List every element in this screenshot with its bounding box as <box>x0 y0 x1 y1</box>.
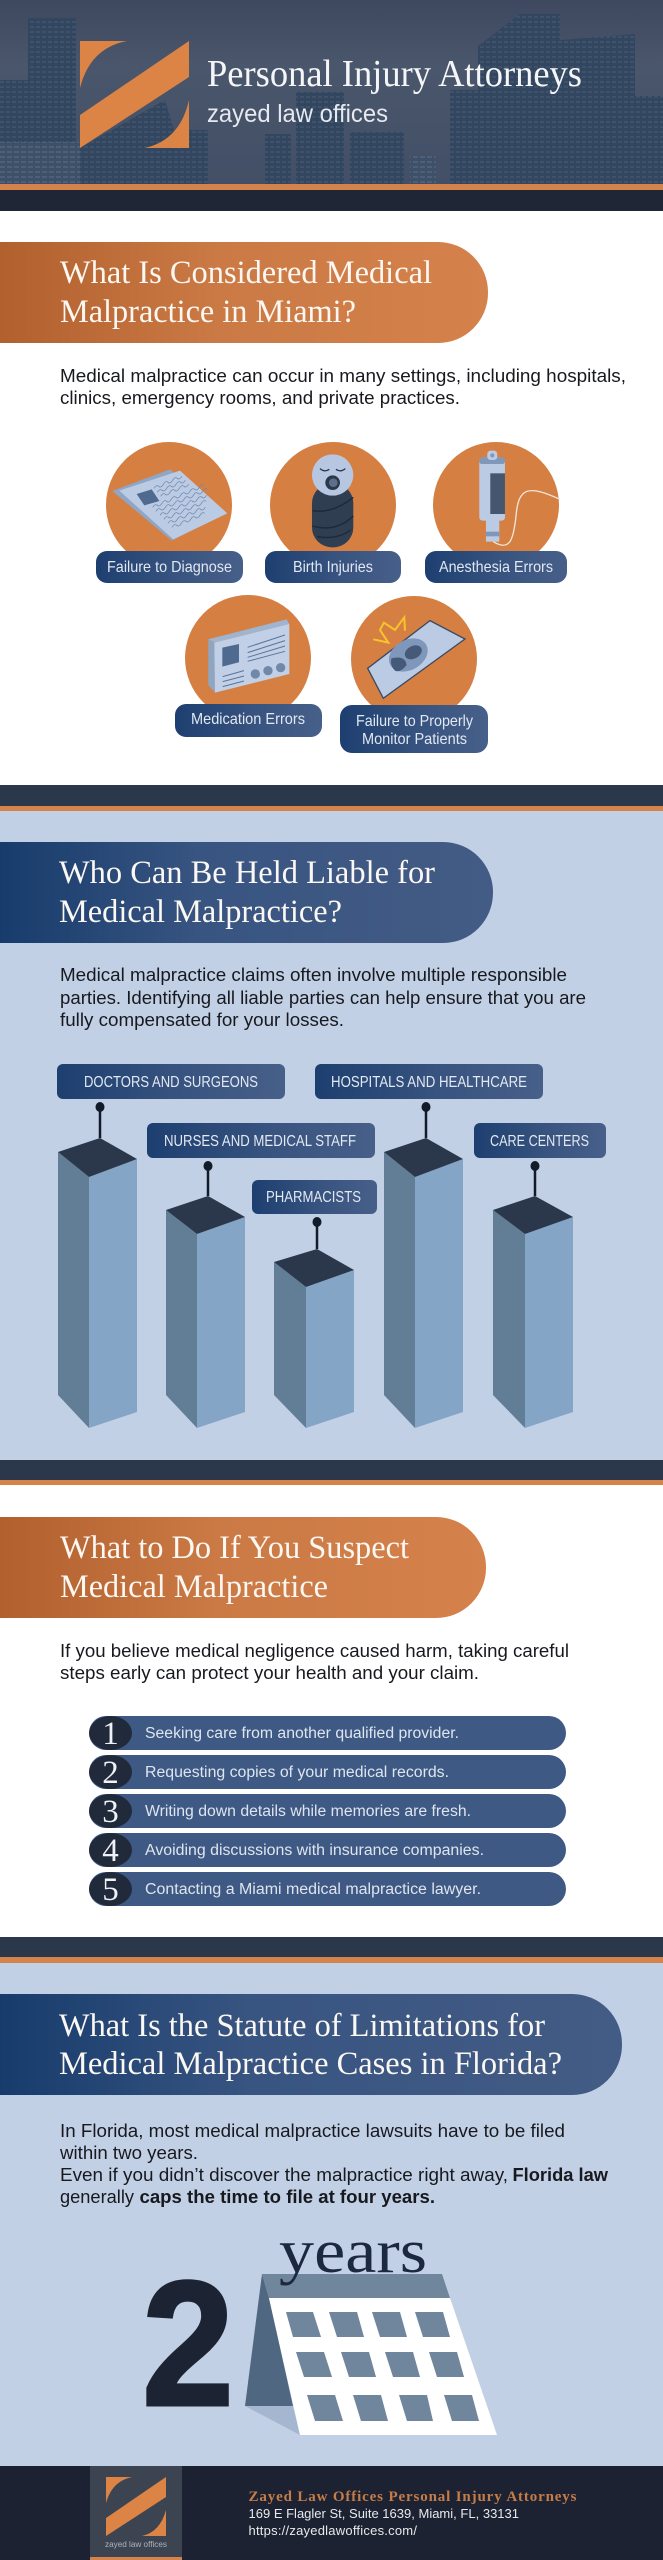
icon card: failure to diagnose <box>96 442 243 583</box>
bar: pharmacists: PHARMACISTS <box>266 1189 361 1206</box>
step 5: 5 <box>102 1872 119 1908</box>
brand title: Personal Injury Attorneys <box>207 53 582 95</box>
heading pill <box>0 1517 486 1618</box>
bar: hospitals and healthcare <box>315 1064 543 1428</box>
heading pill <box>0 1994 622 2095</box>
intro paragraph: steps early can protect your health and your claim. <box>60 1662 479 1683</box>
bar: hospitals and healthcare: HOSPITALS AND HEALTHCARE <box>331 1074 527 1091</box>
intro paragraph: Even if you didn’t discover the malpractice right away, <box>60 2164 508 2185</box>
skyline background <box>0 0 663 184</box>
panel: who can be held liable <box>0 785 663 1485</box>
heading pill: What Is Considered Medical <box>60 255 432 291</box>
header stripe orange <box>0 184 663 190</box>
panel: statute of limitations <box>0 1937 663 2466</box>
intro paragraph <box>60 1640 569 1683</box>
heading pill: What to Do If You Suspect <box>60 1530 409 1566</box>
icon: newspaper <box>112 469 227 541</box>
icon: monitor slab with alert <box>368 617 465 698</box>
step 3: 3 <box>102 1794 119 1830</box>
label <box>96 551 243 583</box>
step 4: Avoiding discussions with insurance companies. <box>145 1842 484 1859</box>
intro paragraph <box>60 964 586 1030</box>
intro paragraph: Florida law <box>512 2164 609 2185</box>
footer url: https://zayedlawoffices.com/ <box>248 2523 417 2538</box>
heading pill: Medical Malpractice Cases in Florida? <box>59 2046 562 2082</box>
label <box>175 704 322 737</box>
bar: pharmacists <box>252 1180 377 1428</box>
big number 2: 2 <box>142 2244 234 2443</box>
label: Medication Errors <box>191 711 305 728</box>
intro paragraph: parties. Identifying all liable parties can help ensure that you are <box>60 987 586 1008</box>
label: Anesthesia Errors <box>439 559 553 576</box>
step 3 <box>89 1794 566 1830</box>
icon: swaddled baby <box>312 454 353 547</box>
step 1 <box>89 1716 566 1752</box>
section stripe orange <box>0 1957 663 1963</box>
panel background <box>0 811 663 1460</box>
intro paragraph <box>60 365 626 408</box>
logo mark <box>80 41 189 148</box>
bar: nurses and medical staff: NURSES AND MEDICAL STAFF <box>164 1133 356 1150</box>
numbered list <box>89 1716 566 1908</box>
heading pill: Medical Malpractice <box>60 1569 328 1605</box>
icon card: anesthesia errors <box>425 442 567 583</box>
label: Failure to Diagnose <box>107 559 232 576</box>
label: Birth Injuries <box>293 559 373 576</box>
icon card: failure to properly monitor patients <box>340 596 488 753</box>
word years: years <box>279 2218 427 2286</box>
heading pill <box>0 242 488 343</box>
icon: calendar <box>245 2274 497 2435</box>
step 4: 4 <box>102 1833 119 1869</box>
section stripe orange <box>0 806 663 811</box>
icon card: birth injuries <box>265 442 401 583</box>
panel background <box>0 1485 663 1937</box>
icon: chart card <box>208 619 289 693</box>
header banner <box>0 0 663 211</box>
bar: care centers <box>474 1123 606 1428</box>
brand subtitle: zayed law offices <box>207 100 388 128</box>
panel background <box>0 211 663 785</box>
bar: doctors and surgeons <box>57 1064 285 1428</box>
footer firm name: Zayed Law Offices Personal Injury Attorneys <box>248 2489 577 2505</box>
heading pill: Who Can Be Held Liable for <box>59 855 435 891</box>
intro paragraph: If you believe medical negligence caused harm, taking careful <box>60 1640 569 1661</box>
label: Failure to Properly <box>356 713 473 730</box>
section stripe orange lower <box>0 1480 663 1485</box>
intro paragraph <box>59 2120 609 2207</box>
heading pill: Malpractice in Miami? <box>60 294 356 330</box>
intro paragraph: Medical malpractice claims often involve multiple responsible <box>60 964 567 985</box>
section stripe dark <box>0 1937 663 1957</box>
intro paragraph: within two years. <box>59 2142 198 2163</box>
intro paragraph: Medical malpractice can occur in many settings, including hospitals, <box>60 365 626 386</box>
panel: what is considered medical malpractice <box>0 211 663 785</box>
bar chart: liable parties <box>57 1064 606 1428</box>
label <box>425 551 567 583</box>
heading pill: What Is the Statute of Limitations for <box>59 2008 545 2044</box>
footer background <box>0 2466 663 2560</box>
heading pill <box>0 842 493 943</box>
bar: care centers: CARE CENTERS <box>490 1133 589 1150</box>
intro paragraph: fully compensated for your losses. <box>60 1009 344 1030</box>
label <box>340 705 488 753</box>
heading pill: Medical Malpractice? <box>59 894 342 930</box>
footer logo <box>90 2466 182 2560</box>
footer logo: zayed law offices <box>105 2540 167 2549</box>
icon card: medication errors <box>175 595 322 737</box>
step 1: Seeking care from another qualified provider. <box>145 1725 459 1742</box>
bar: nurses and medical staff <box>147 1123 375 1428</box>
label <box>265 551 401 583</box>
footer address: 169 E Flagler St, Suite 1639, Miami, FL, 33131 <box>248 2506 519 2521</box>
icon: anesthesia syringe <box>479 451 560 545</box>
step 5 <box>89 1872 566 1908</box>
intro paragraph: clinics, emergency rooms, and private practices. <box>60 387 460 408</box>
panel background <box>0 1963 663 2466</box>
intro paragraph: In Florida, most medical malpractice lawsuits have to be filed <box>60 2120 565 2141</box>
step 3: Writing down details while memories are fresh. <box>145 1803 471 1820</box>
header stripe dark <box>0 190 663 211</box>
bar: doctors and surgeons: DOCTORS AND SURGEONS <box>84 1074 258 1091</box>
step 2: Requesting copies of your medical records. <box>145 1764 449 1781</box>
step 2: 2 <box>102 1755 119 1791</box>
intro paragraph: caps the time to file at four years. <box>140 2186 435 2207</box>
step 2 <box>89 1755 566 1791</box>
footer <box>0 2466 663 2560</box>
section stripe dark lower <box>0 1460 663 1480</box>
label: Monitor Patients <box>362 731 467 748</box>
step 5: Contacting a Miami medical malpractice lawyer. <box>145 1881 481 1898</box>
section stripe dark <box>0 785 663 806</box>
panel: what to do if you suspect <box>0 1485 663 1937</box>
intro paragraph: generally <box>60 2186 135 2207</box>
step 4 <box>89 1833 566 1869</box>
step 1: 1 <box>102 1716 119 1752</box>
